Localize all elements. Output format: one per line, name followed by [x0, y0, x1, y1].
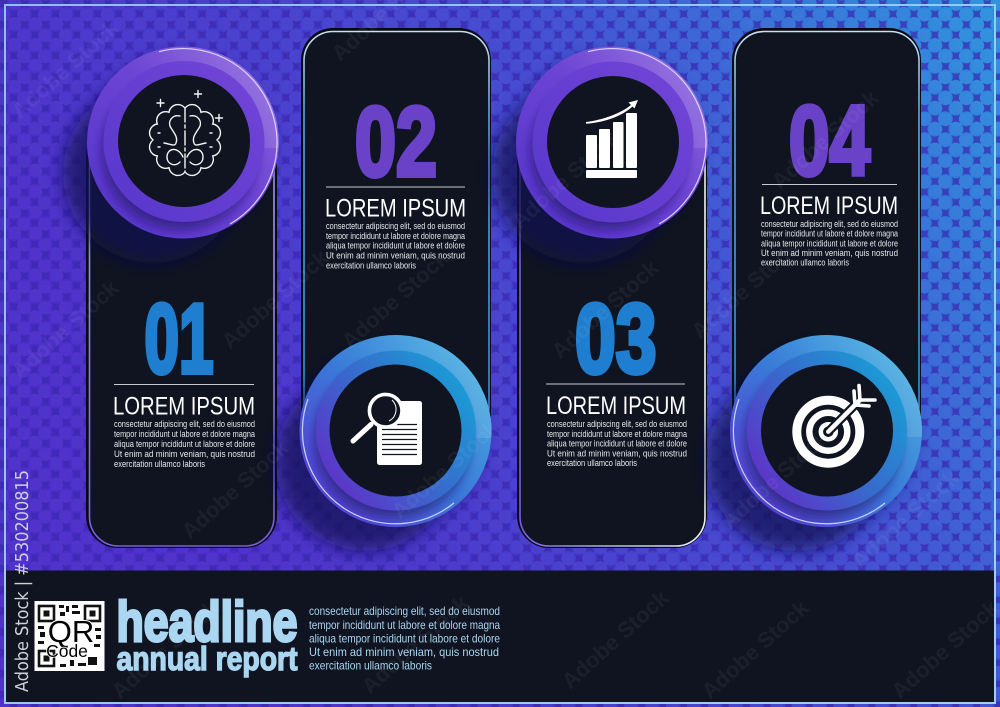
faint diagonal watermarks: Adobe Stock	[7, 15, 124, 124]
panel: step 1 card	[86, 125, 277, 548]
step 3 body text: tempor incididunt ut labore et dolore magna	[547, 429, 687, 439]
icon: brain	[150, 90, 222, 175]
faint diagonal watermarks: Adobe Stock	[767, 85, 884, 194]
panel: step 3 card	[517, 125, 707, 548]
step 2 body text: consectetur adipiscing elit, sed do eiusmod	[326, 221, 465, 231]
faint diagonal watermarks: Adobe Stock	[7, 275, 124, 384]
step 3 heading: LOREM IPSUM	[546, 392, 686, 420]
step 4 body text: aliqua tempor incididunt ut labore et dolore	[761, 238, 898, 248]
icon: bar chart with rising arrow	[586, 100, 638, 178]
step 1 body text: aliqua tempor incididunt ut labore et dolore	[114, 439, 255, 449]
step 3 body text: aliqua tempor incididunt ut labore et dolore	[547, 438, 687, 448]
icon: target with arrow	[797, 386, 875, 463]
faint diagonal watermarks: Adobe Stock	[847, 465, 964, 574]
faint diagonal watermarks: Adobe Stock	[557, 585, 674, 694]
footer body text: Ut enim ad minim veniam, quis nostrud	[309, 645, 499, 659]
step 4 body text: tempor incididunt ut labore et dolore magna	[761, 228, 898, 238]
step 4 body text: exercitation ullamco laboris	[761, 258, 849, 268]
footer body text	[309, 604, 500, 672]
step 3 body text	[547, 419, 687, 468]
panel: step 2 card	[301, 28, 491, 445]
step 2 body text: tempor incididunt ut labore et dolore magna	[326, 231, 465, 241]
step 4 body text: consectetur adipiscing elit, sed do eiusmod	[761, 219, 898, 229]
faint diagonal watermarks: Adobe Stock	[337, 245, 454, 354]
step 3 body text: Ut enim ad minim veniam, quis nostrud	[547, 448, 687, 458]
step 1 body text: exercitation ullamco laboris	[114, 459, 206, 469]
vertical stock label: Adobe Stock | #530200815	[12, 470, 33, 692]
faint diagonal watermarks: Adobe Stock	[697, 595, 814, 704]
footer body text: tempor incididunt ut labore et dolore magna	[309, 618, 500, 632]
step 2 body text	[326, 221, 465, 270]
faint diagonal watermarks: Adobe Stock	[107, 595, 224, 704]
faint diagonal watermarks: Adobe Stock	[217, 245, 334, 354]
step 4 body text	[761, 219, 898, 268]
footer body text: exercitation ullamco laboris	[309, 658, 432, 672]
disc: step 2 search document	[300, 335, 492, 527]
step 3 body text: exercitation ullamco laboris	[547, 458, 638, 468]
footer body text: consectetur adipiscing elit, sed do eiusmod	[309, 604, 500, 618]
step 2 body text: exercitation ullamco laboris	[326, 260, 417, 270]
step 1 body text: consectetur adipiscing elit, sed do eiusmod	[114, 419, 255, 429]
QR code: Code	[46, 641, 88, 661]
step 4 body text: Ut enim ad minim veniam, quis nostrud	[761, 248, 898, 258]
step 4 heading: LOREM IPSUM	[760, 192, 898, 220]
step 1 body text: Ut enim ad minim veniam, quis nostrud	[114, 449, 255, 459]
faint diagonal watermarks: Adobe Stock	[547, 255, 664, 364]
QR label: QR	[48, 614, 94, 649]
step 2 body text: aliqua tempor incididunt ut labore et dolore	[326, 240, 465, 250]
faint diagonal watermarks: Adobe Stock	[717, 425, 834, 534]
faint diagonal watermarks: Adobe Stock	[357, 590, 474, 699]
faint diagonal watermarks: Adobe Stock	[177, 435, 294, 544]
step 2 heading: LOREM IPSUM	[325, 194, 466, 222]
step 3 body text: consectetur adipiscing elit, sed do eiusmod	[547, 419, 687, 429]
step 2 body text: Ut enim ad minim veniam, quis nostrud	[326, 250, 465, 260]
faint diagonal watermarks: Adobe Stock	[387, 415, 504, 524]
step 1 body text: tempor incididunt ut labore et dolore magna	[114, 429, 255, 439]
footer body text: aliqua tempor incididunt ut labore et dolore	[309, 632, 500, 646]
subheadline: annual report	[116, 640, 298, 677]
step number 01: 01	[144, 284, 214, 394]
step number 02: 02	[355, 86, 437, 196]
faint diagonal watermarks: Adobe Stock	[687, 235, 804, 344]
disc: step 3 growth chart	[516, 46, 708, 238]
faint diagonal watermarks: Adobe Stock	[887, 595, 1000, 704]
step 1 body text	[114, 419, 255, 469]
icon: magnifier over document	[353, 394, 422, 465]
step number 03: 03	[575, 284, 656, 394]
panel: step 4 card	[732, 28, 921, 445]
QR code	[34, 601, 104, 671]
step 1 heading: LOREM IPSUM	[113, 392, 255, 420]
step number 04: 04	[789, 86, 870, 196]
faint diagonal watermarks: Adobe Stock	[507, 125, 624, 234]
disc: step 4 target	[730, 335, 922, 527]
footer band	[5, 570, 995, 703]
headline: headline	[116, 590, 298, 654]
disc: step 1 brain	[87, 46, 279, 238]
